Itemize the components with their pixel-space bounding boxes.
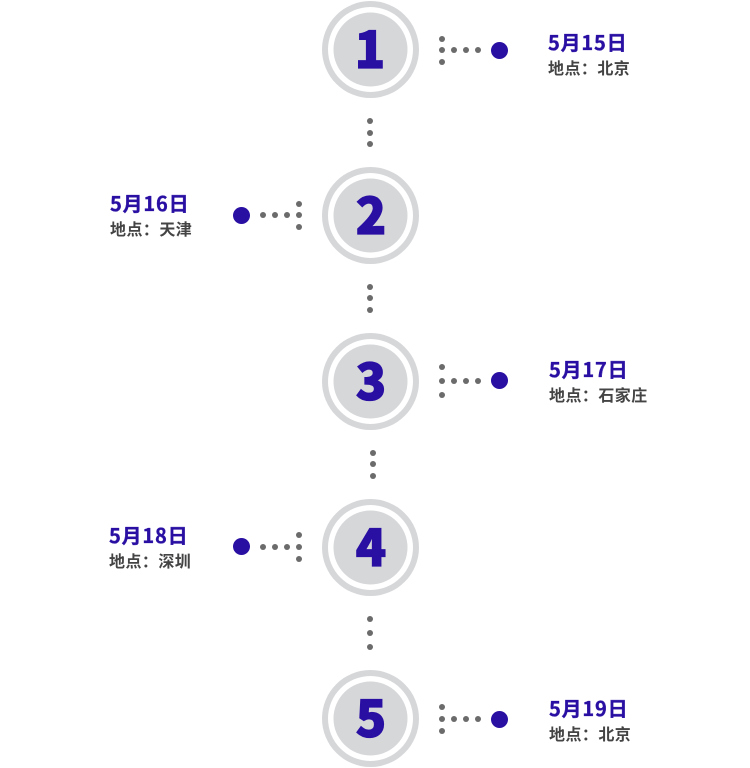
connector 1 [439, 36, 481, 65]
vertical dots 2-3 [367, 284, 373, 313]
date and place 1: 5月15日 [548, 27, 627, 56]
date and place 5: 地点：北京 [549, 721, 631, 745]
connector 4 [260, 532, 302, 562]
badge 3 [322, 333, 419, 430]
badge 2: 2 [356, 177, 386, 249]
marker 5 [491, 711, 508, 728]
step 4 [109, 499, 419, 596]
marker 2 [233, 207, 250, 224]
date and place 5: 5月19日 [549, 693, 628, 722]
date and place 2: 5月16日 [110, 188, 189, 217]
badge 2 [322, 167, 419, 264]
date and place 3 [549, 354, 648, 406]
badge 5: 5 [356, 680, 386, 752]
marker 4 [233, 538, 250, 555]
badge 1: 1 [355, 11, 385, 83]
marker 3 [491, 372, 508, 389]
badge 1 [322, 1, 419, 98]
date and place 4 [109, 520, 191, 572]
badge 3: 3 [356, 343, 386, 415]
date and place 2: 地点：天津 [110, 216, 192, 240]
marker 1 [491, 42, 508, 59]
date and place 2 [110, 188, 192, 240]
connector 3 [439, 364, 481, 398]
date and place 3: 地点：石家庄 [549, 382, 648, 406]
badge 4: 4 [356, 509, 386, 581]
step 3 [322, 333, 648, 430]
date and place 4: 地点：深圳 [109, 548, 191, 572]
date and place 5 [549, 693, 631, 745]
date and place 3: 5月17日 [549, 354, 628, 383]
badge 4 [322, 499, 419, 596]
vertical dots 1-2 [367, 118, 373, 147]
step 2 [110, 167, 419, 264]
date and place 4: 5月18日 [109, 520, 188, 549]
date and place 1 [548, 27, 630, 79]
vertical dots 4-5 [367, 616, 373, 650]
date and place 1: 地点：北京 [548, 55, 630, 79]
step 5 [322, 670, 631, 767]
vertical dots 3-4 [370, 450, 376, 479]
step 1 [322, 1, 630, 98]
connector 2 [260, 201, 302, 230]
badge 5 [322, 670, 419, 767]
connector 5 [439, 704, 481, 734]
